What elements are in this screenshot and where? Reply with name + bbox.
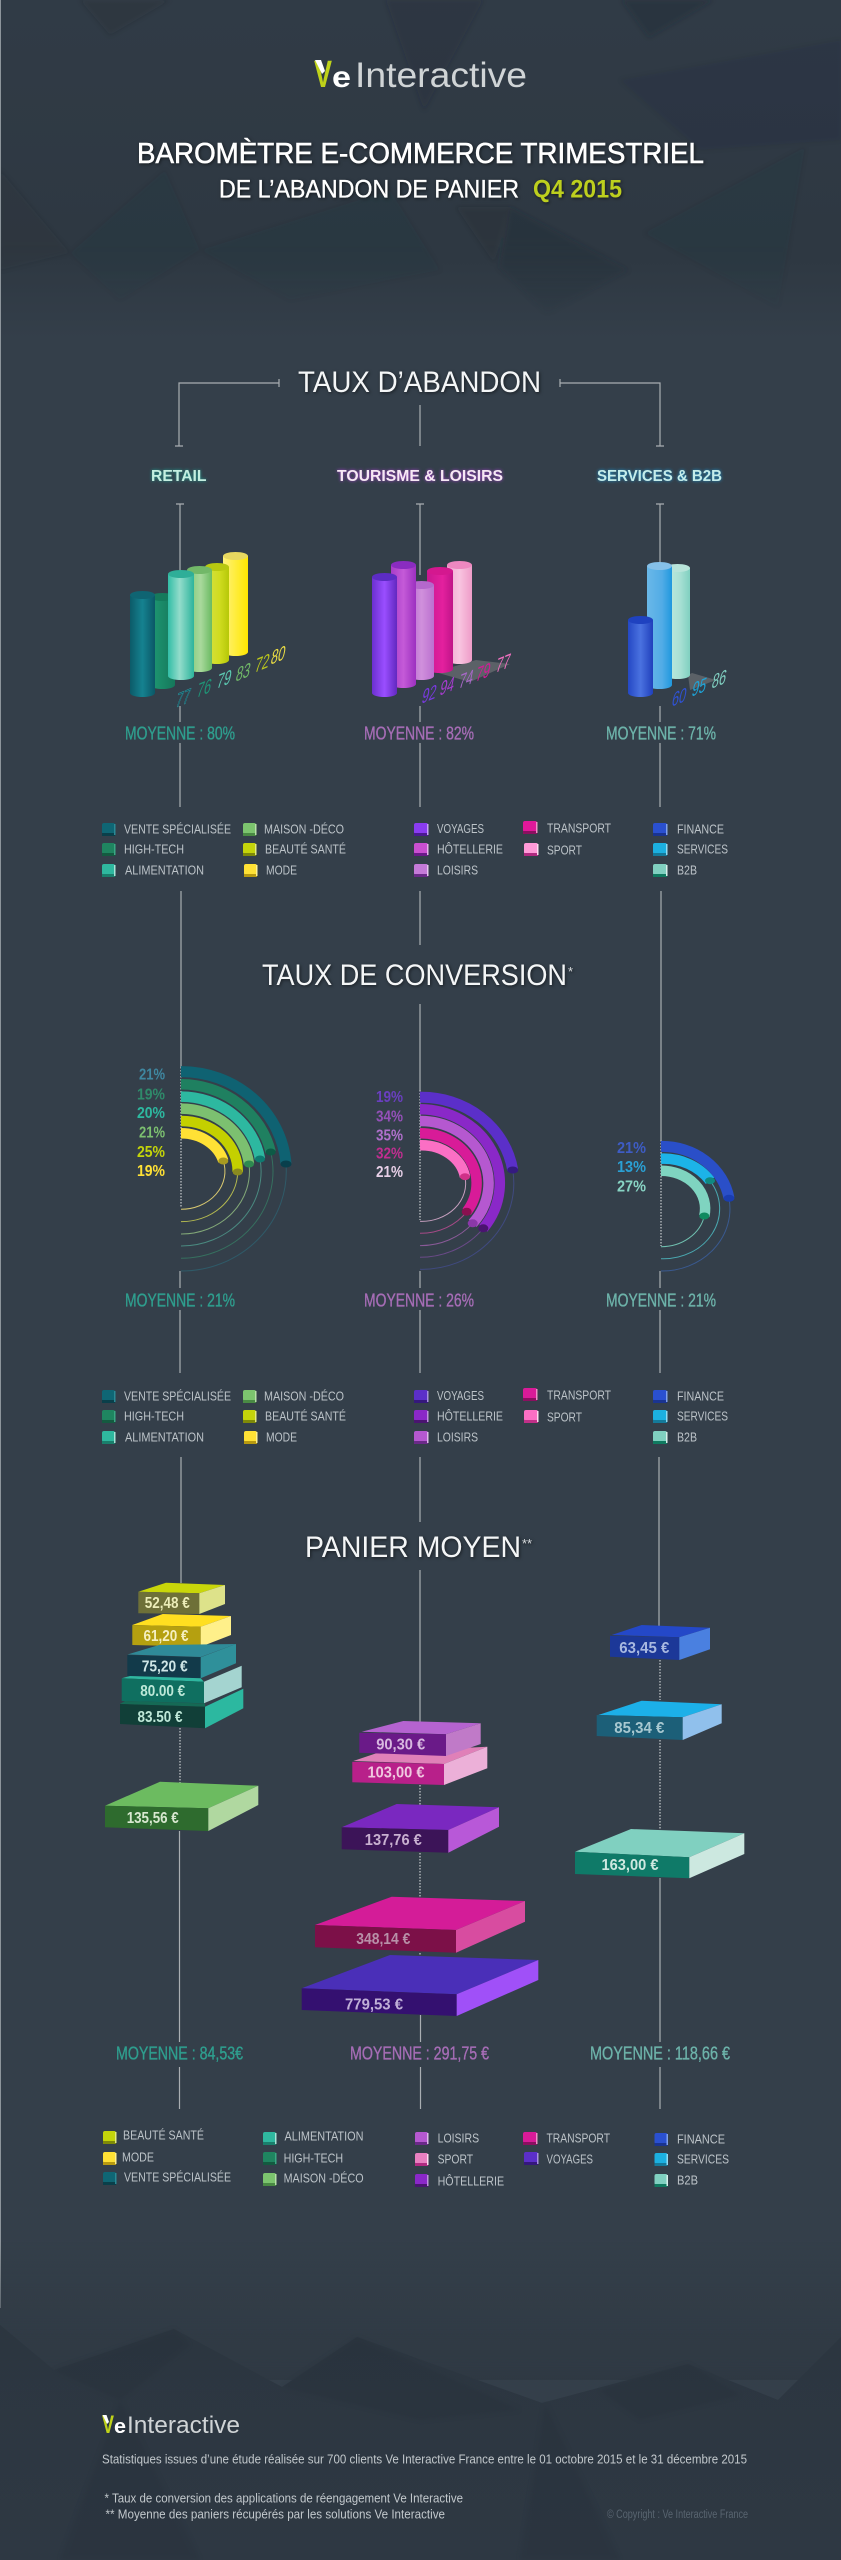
radial values: services: 21% — [617, 1140, 646, 1157]
bar chart: services abandon — [628, 562, 690, 697]
box: maison déco 135,56: 135,56 € — [127, 1810, 179, 1827]
moyenne panier: retail: MOYENNE : 84,53€ — [116, 2044, 243, 2064]
category: retail: RETAIL — [151, 468, 207, 485]
category: tourisme et loisirs: TOURISME & LOISIRS — [337, 468, 503, 485]
category: services et b2b: SERVICES & B2B — [597, 468, 722, 485]
legend abandon: tourisme: VOYAGES — [437, 821, 484, 836]
box: hôtellerie 137,76: 137,76 € — [365, 1832, 422, 1849]
radial chart: retail conversion — [181, 1072, 292, 1271]
column lines into conversion section — [181, 891, 661, 1140]
heading: taux d'abandon: TAUX D’ABANDON — [298, 366, 541, 399]
column lines under boxes — [180, 1831, 660, 2109]
legend panier: retail: ALIMENTATION — [284, 2128, 364, 2144]
legend abandon: services: B2B — [677, 862, 697, 878]
radial chart: services conversion — [661, 1146, 734, 1271]
bar values: retail: 77 — [174, 684, 193, 713]
bar values: retail: 79 — [215, 665, 234, 694]
bar values: retail: 83 — [234, 658, 253, 687]
box: b2b 163,00: 163,00 € — [602, 1857, 659, 1874]
bar values: retail: 72 — [253, 649, 272, 678]
column lines under bars — [180, 706, 660, 807]
bar values: retail: 76 — [195, 674, 214, 703]
legend abandon: services: FINANCE — [677, 822, 724, 836]
legend conversion: retail: ALIMENTATION — [125, 1430, 204, 1444]
radial chart: tourisme conversion — [420, 1097, 518, 1269]
legend conversion: services: B2B — [677, 1430, 697, 1444]
box: b2b 163,00 — [575, 1829, 744, 1878]
legend panier: tourisme: HÔTELLERIE — [438, 2174, 504, 2188]
legend conversion: retail: MODE — [266, 1430, 297, 1444]
box: services 85,34: 85,34 € — [614, 1720, 664, 1737]
radial values: tourisme: 32% — [376, 1146, 403, 1162]
legend panier: retail: BEAUTÉ SANTÉ — [123, 2128, 204, 2142]
title — [137, 137, 704, 204]
legend panier: tourisme: VOYAGES — [546, 2152, 593, 2166]
header low-poly background — [1, 0, 841, 291]
box: transport 348,14: 348,14 € — [356, 1931, 410, 1948]
legend conversion: services: FINANCE — [677, 1388, 724, 1404]
legend conversion: retail: MAISON -DÉCO — [264, 1388, 344, 1404]
legend abandon: tourisme: TRANSPORT — [547, 820, 611, 836]
footer logo: Ve Interactive: e — [114, 2416, 126, 2438]
radial values: services — [617, 1140, 646, 1196]
legend abandon: retail: ALIMENTATION — [125, 862, 204, 878]
heading: panier moyen: PANIER MOYEN — [305, 1531, 521, 1564]
legend conversion: tourisme: TRANSPORT — [547, 1388, 611, 1402]
legend abandon: tourisme: HÔTELLERIE — [437, 842, 503, 856]
footer logo: Ve Interactive: V — [102, 2411, 114, 2439]
legend panier: retail — [103, 2128, 364, 2186]
heading: taux de conversion: TAUX DE CONVERSION — [262, 959, 567, 992]
box: alimentation 83,50 — [120, 1689, 243, 1728]
bar values: tourisme — [420, 649, 513, 709]
legend conversion: services: SERVICES — [677, 1408, 728, 1424]
bar values: tourisme: 77 — [494, 649, 513, 678]
legend conversion: retail: HIGH-TECH — [124, 1408, 184, 1424]
legend conversion: tourisme: VOYAGES — [437, 1388, 484, 1403]
box: alimentation 83,50: 83.50 € — [138, 1709, 183, 1726]
bar values: services: 86 — [710, 665, 729, 694]
box: vente spécialisée 75,20 — [127, 1644, 236, 1678]
moyenne conversion: services: MOYENNE : 21% — [606, 1290, 716, 1310]
logo: Ve Interactive: e — [332, 61, 351, 94]
moyenne conversion: retail: MOYENNE : 21% — [125, 1290, 235, 1310]
legend abandon: retail: HIGH-TECH — [124, 842, 184, 856]
box: services 85,34 — [597, 1701, 722, 1740]
box: maison déco 135,56 — [105, 1782, 258, 1831]
radial values: tourisme: 21% — [376, 1164, 403, 1181]
footnote: panier: ** Moyenne des paniers récupérés par les solutions Ve Interactive — [106, 2506, 445, 2522]
bar chart: tourisme abandon — [372, 561, 472, 697]
bar values: retail — [174, 641, 288, 713]
footer logo: Ve Interactive: Interactive — [127, 2412, 240, 2439]
radial values: tourisme: 19% — [376, 1089, 403, 1106]
bar values: tourisme: 74 — [457, 665, 476, 694]
column lines under radial charts — [180, 1271, 660, 1373]
moyenne panier: tourisme: MOYENNE : 291,75 € — [350, 2044, 489, 2064]
legend abandon: retail — [102, 822, 346, 878]
title: DE L’ABANDON DE PANIER — [219, 176, 519, 204]
title: BAROMÈTRE E-COMMERCE TRIMESTRIEL — [137, 137, 704, 170]
left edge sliver — [0, 0, 1, 2308]
legend abandon: retail: BEAUTÉ SANTÉ — [265, 842, 346, 856]
logo: Ve Interactive: Interactive — [355, 56, 527, 95]
logo: Ve Interactive: V — [314, 54, 332, 96]
box: voyages 779,53: 779,53 € — [345, 1996, 403, 2014]
moyenne conversion: tourisme: MOYENNE : 26% — [364, 1290, 474, 1310]
legend abandon: retail: MODE — [266, 862, 297, 878]
legend panier: services: B2B — [677, 2172, 698, 2188]
legend panier: retail: MODE — [122, 2150, 154, 2164]
legend conversion: retail — [102, 1388, 346, 1444]
bar values: tourisme: 79 — [474, 658, 493, 687]
legend panier: retail: VENTE SPÉCIALISÉE — [124, 2170, 231, 2184]
heading: panier moyen: ** — [522, 1536, 532, 1551]
legend abandon: services — [653, 822, 728, 878]
radial values: tourisme — [376, 1089, 403, 1181]
legend abandon: tourisme: LOISIRS — [437, 862, 478, 878]
legend panier: services: FINANCE — [677, 2132, 725, 2146]
moyenne panier: services: MOYENNE : 118,66 € — [590, 2044, 730, 2064]
bar values: services: 60 — [670, 683, 689, 712]
dotted links through stacked boxes — [180, 1660, 660, 1967]
box: high-tech 80,00: 80.00 € — [140, 1683, 185, 1700]
box: transport 348,14 — [315, 1897, 525, 1953]
legend conversion: tourisme: HÔTELLERIE — [437, 1408, 503, 1424]
radial values: retail: 25% — [137, 1144, 165, 1161]
radial values: services: 27% — [617, 1178, 646, 1196]
box: hôtellerie 137,76 — [342, 1804, 499, 1853]
radial values: retail: 20% — [137, 1105, 165, 1122]
legend panier: tourisme: LOISIRS — [438, 2130, 479, 2146]
box: loisirs 90,30 — [359, 1721, 481, 1756]
bar floor shadow: services — [688, 673, 716, 690]
box: finance 63,45 — [610, 1625, 710, 1660]
legend panier: retail: MAISON -DÉCO — [284, 2170, 364, 2186]
moyenne abandon: tourisme: MOYENNE : 82% — [364, 724, 474, 744]
bar values: tourisme: 94 — [438, 672, 457, 701]
box: high-tech 80,00 — [122, 1666, 242, 1703]
bar values: tourisme: 92 — [420, 680, 439, 709]
column lines above bars — [176, 504, 664, 580]
box: sport 103,00: 103,00 € — [368, 1764, 425, 1782]
box: finance 63,45: 63,45 € — [619, 1640, 669, 1657]
box: sport 103,00 — [352, 1747, 487, 1785]
bar values: services — [670, 665, 729, 712]
footer low-poly background — [0, 2240, 841, 2560]
legend conversion: tourisme: LOISIRS — [437, 1430, 478, 1444]
legend conversion: retail: VENTE SPÉCIALISÉE — [124, 1388, 231, 1404]
legend conversion: tourisme: SPORT — [547, 1410, 582, 1424]
legend panier: tourisme: SPORT — [438, 2152, 473, 2166]
box: loisirs 90,30: 90,30 € — [376, 1736, 425, 1754]
bar values: retail: 80 — [269, 641, 288, 670]
legend conversion: services — [653, 1388, 728, 1444]
moyenne abandon: retail: MOYENNE : 80% — [125, 724, 235, 744]
radial values: tourisme: 34% — [376, 1108, 403, 1126]
bar chart: retail abandon — [130, 552, 248, 697]
radial values: retail: 19% — [137, 1086, 165, 1104]
box: mode 61,20: 61,20 € — [144, 1628, 189, 1645]
dotted axes of radial charts — [181, 1067, 661, 1246]
radial values: tourisme: 35% — [376, 1128, 403, 1144]
legend panier: tourisme — [415, 2130, 610, 2188]
radial values: services: 13% — [617, 1159, 646, 1176]
title: Q4 2015 — [533, 176, 622, 204]
legend conversion: tourisme — [414, 1388, 611, 1444]
legend abandon: tourisme: SPORT — [547, 842, 582, 858]
copyright: © Copyright : Ve Interactive France — [607, 2509, 748, 2521]
legend abandon: retail: MAISON -DÉCO — [264, 822, 344, 836]
radial values: retail: 19% — [137, 1163, 165, 1180]
legend conversion: retail: BEAUTÉ SANTÉ — [265, 1408, 346, 1424]
legend panier: services: SERVICES — [677, 2152, 729, 2166]
legend panier: retail: HIGH-TECH — [284, 2150, 343, 2166]
box: hôtellerie 52,48 — [138, 1583, 225, 1614]
bar values: services: 95 — [690, 673, 709, 702]
connector brackets — [175, 379, 664, 446]
legend panier: services — [654, 2132, 729, 2188]
box: vente spécialisée 75,20: 75,20 € — [142, 1658, 188, 1676]
heading: taux de conversion: * — [568, 964, 573, 979]
legend abandon: services: SERVICES — [677, 842, 728, 856]
radial values: retail: 21% — [139, 1066, 165, 1084]
radial values: retail — [137, 1066, 165, 1180]
bar floor shadow: tourisme — [435, 660, 510, 682]
legend abandon: retail: VENTE SPÉCIALISÉE — [124, 822, 231, 836]
box: mode 61,20 — [132, 1614, 231, 1647]
footnote: conversion: * Taux de conversion des applications de réengagement Ve Interactive — [104, 2490, 463, 2506]
box: voyages 779,53 — [302, 1955, 538, 2016]
legend abandon: tourisme — [414, 820, 611, 878]
legend panier: tourisme: TRANSPORT — [546, 2130, 610, 2146]
radial values: retail: 21% — [139, 1124, 165, 1142]
footer study note: Statistiques issues d’une étude réalisée sur 700 clients Ve Interactive France entre le 01 octobre 2015 et le 31 décembre 2015 — [102, 2452, 747, 2466]
box: hôtellerie 52,48: 52,48 € — [145, 1595, 190, 1612]
moyenne abandon: services: MOYENNE : 71% — [606, 724, 716, 744]
column lines into panier section — [181, 1457, 659, 1722]
